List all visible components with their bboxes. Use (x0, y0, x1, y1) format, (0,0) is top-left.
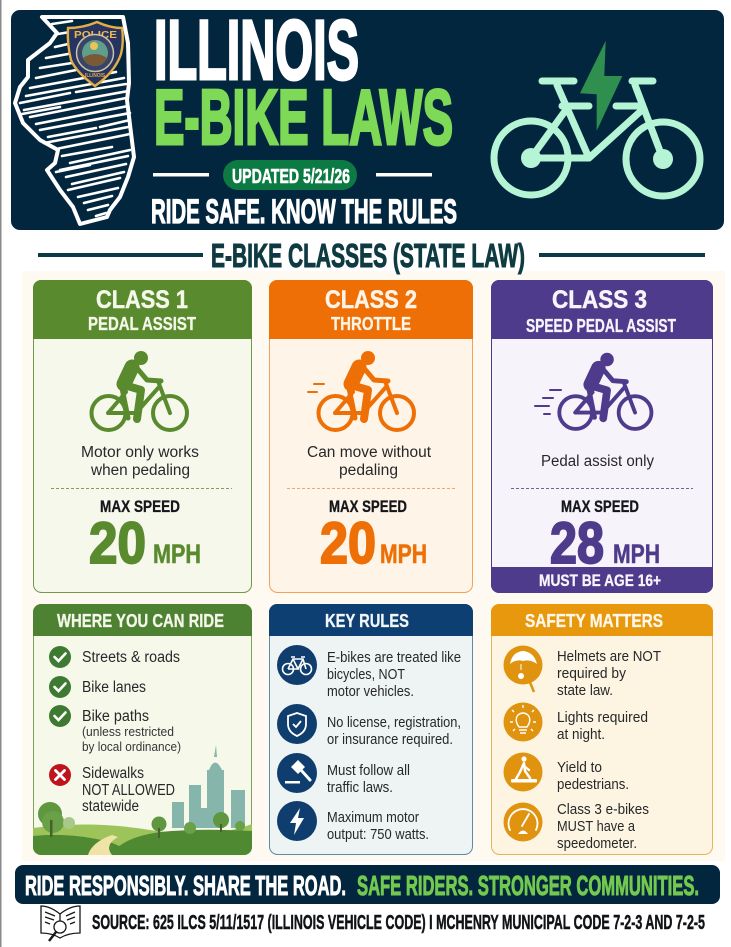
panel: key rules: Maximum motor (327, 810, 419, 826)
icon: check (49, 705, 71, 727)
icon: lightning (277, 801, 317, 841)
police badge: POLICE (74, 29, 117, 41)
panel: safety matters: Class 3 e-bikes (557, 802, 649, 818)
panel: key rules (269, 604, 473, 854)
panel: class 3: MPH (613, 539, 660, 569)
panel: where you can ride: statewide (82, 798, 139, 815)
panel: where you can ride: Bike lanes (82, 679, 146, 696)
panel: safety matters: at night. (557, 727, 605, 743)
icon: check (49, 676, 71, 698)
panel: class 2: MPH (380, 539, 427, 569)
panel: class 3: Pedal assist only (541, 453, 654, 470)
panel: class 2: pedaling (339, 462, 398, 479)
panel: class 2: Can move without (307, 444, 432, 461)
icon: shield (277, 704, 317, 744)
icon: electric bike (494, 41, 700, 196)
police badge (68, 22, 123, 86)
panel: where you can ride: Streets & roads (82, 649, 180, 666)
panel: where you can ride: NOT ALLOWED (82, 782, 175, 799)
title: Illinois: ILLINOIS (154, 3, 359, 97)
panel: class 2: THROTTLE (331, 314, 411, 334)
panel: class 1: Motor only works (81, 444, 199, 461)
panel: key rules: Must follow all (327, 763, 410, 779)
panel: key rules: traffic laws. (327, 780, 393, 796)
section heading: E-BIKE CLASSES (STATE LAW) (211, 237, 525, 274)
header banner (11, 3, 724, 231)
icon: light bulb (504, 702, 542, 742)
age requirement bar: MUST BE AGE 16+ (539, 572, 661, 590)
panel: class 3: 28 (550, 511, 604, 576)
panel: class 1: PEDAL ASSIST (88, 314, 196, 334)
icon: check (49, 646, 71, 668)
panel: key rules: bicycles, NOT (327, 667, 405, 683)
panel: safety matters (491, 604, 713, 854)
tagline: RIDE SAFE. KNOW THE RULES (151, 193, 457, 231)
panel: safety matters: Lights required (557, 710, 648, 726)
panel: safety matters: MUST have a (557, 819, 636, 835)
panel: class 3: SPEED PEDAL ASSIST (526, 315, 677, 336)
panel: class 1: when pedaling (90, 462, 190, 479)
icon: speed rider (535, 353, 651, 429)
panel: class 1: MPH (153, 539, 201, 569)
updated date pill (223, 160, 357, 190)
panel: safety matters: SAFETY MATTERS (525, 611, 663, 631)
icon: speedometer (504, 802, 542, 842)
panel: key rules: No license, registration, (327, 715, 461, 731)
panel: where you can ride: (unless restricted (82, 725, 174, 739)
Illinois state map (15, 17, 134, 224)
panel: class 1: 20 (89, 511, 146, 576)
panel: class 1 (33, 280, 252, 592)
age requirement bar (491, 567, 713, 593)
updated date pill: UPDATED 5/21/26 (232, 166, 350, 188)
panel: class 1: CLASS 1 (96, 286, 188, 314)
panel: class 3 (491, 280, 713, 593)
panel: safety matters: speedometer. (557, 836, 637, 852)
panel: class 1: MAX SPEED (100, 497, 180, 516)
icon: pedestrian (504, 752, 542, 792)
panel: where you can ride: WHERE YOU CAN RIDE (57, 611, 224, 631)
panel: key rules: motor vehicles. (327, 684, 414, 700)
panel: safety matters: required by (557, 666, 627, 682)
icon: bicycle (277, 645, 317, 685)
panel: class 3: CLASS 3 (552, 286, 647, 314)
title: E-Bike Laws: E-BIKE LAWS (154, 73, 453, 161)
panel: where you can ride: Bike paths (82, 708, 149, 725)
icon: helmet (504, 646, 542, 692)
panel: safety matters: state law. (557, 683, 613, 699)
panel: key rules: output: 750 watts. (327, 827, 429, 843)
panel: class 2: 20 (320, 511, 376, 576)
police badge: ILLINOIS (85, 73, 106, 79)
footer banner (15, 865, 720, 904)
icon: book with magnifier (41, 906, 80, 941)
panel: key rules: or insurance required. (327, 732, 453, 748)
panel: class 2: MAX SPEED (329, 497, 407, 516)
panel: key rules: E-bikes are treated like (327, 650, 461, 666)
icon: not allowed (49, 764, 71, 786)
panel: class 3: MAX SPEED (561, 497, 639, 516)
icon: rider with throttle lines (308, 351, 414, 430)
illustration: city and park (33, 745, 252, 855)
icon: rider (92, 351, 187, 430)
panel: where you can ride: Sidewalks (82, 765, 144, 782)
panel: safety matters: Helmets are NOT (557, 649, 661, 665)
panel: where you can ride (33, 604, 252, 855)
panel: class 2 (269, 280, 473, 592)
panel: safety matters: Yield to (557, 760, 602, 776)
panel: class 2: CLASS 2 (325, 286, 417, 314)
icon: gavel (277, 753, 317, 793)
panel: where you can ride: by local ordinance) (82, 740, 181, 754)
panel: safety matters: pedestrians. (557, 777, 629, 793)
footer banner: RIDE RESPONSIBLY. SHARE THE ROAD. (25, 870, 346, 901)
panel: key rules: KEY RULES (325, 611, 409, 631)
